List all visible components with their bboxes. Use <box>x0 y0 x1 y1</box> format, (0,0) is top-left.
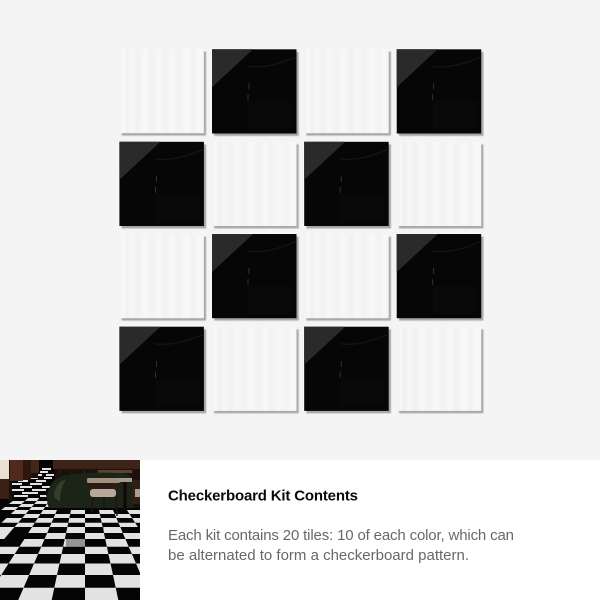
body text: Each kit contains 20 tiles: 10 of each color, which can <box>168 527 514 544</box>
tile: row 1 column 4 black <box>396 49 483 136</box>
tile: row 2 column 3 black <box>304 141 391 228</box>
tile: row 4 column 2 white <box>212 327 299 413</box>
floor reflections <box>66 527 108 563</box>
heading: Checkerboard Kit Contents <box>168 488 358 504</box>
sofa <box>47 473 133 508</box>
tile: row 3 column 1 white <box>119 234 206 321</box>
tile: row 3 column 2 black <box>211 233 299 321</box>
tile: row 1 column 1 white <box>119 49 206 136</box>
tile: row 1 column 3 white <box>304 49 391 136</box>
tile: row 3 column 3 white <box>304 234 391 321</box>
floor white squares <box>0 468 170 600</box>
body text <box>168 527 514 564</box>
left wall and pillars <box>0 460 9 479</box>
background panel <box>0 0 600 460</box>
tile: row 2 column 2 white <box>212 142 299 228</box>
body text: be alternated to form a checkerboard pattern. <box>168 547 469 564</box>
panel: tile checkerboard grid <box>119 49 483 413</box>
tile: row 3 column 4 black <box>396 233 483 321</box>
tile: row 2 column 1 black <box>119 141 206 228</box>
back wall <box>46 460 140 508</box>
photo: lounge with checkerboard floor <box>0 460 170 600</box>
tile: row 4 column 3 black <box>304 326 391 413</box>
tile: row 2 column 4 white <box>397 142 483 228</box>
chairs and table <box>87 478 140 516</box>
tile: row 4 column 1 black <box>119 326 206 413</box>
bottom white panel <box>0 460 600 600</box>
tile: row 1 column 2 black <box>211 49 299 136</box>
tile: row 4 column 4 white <box>397 327 483 413</box>
